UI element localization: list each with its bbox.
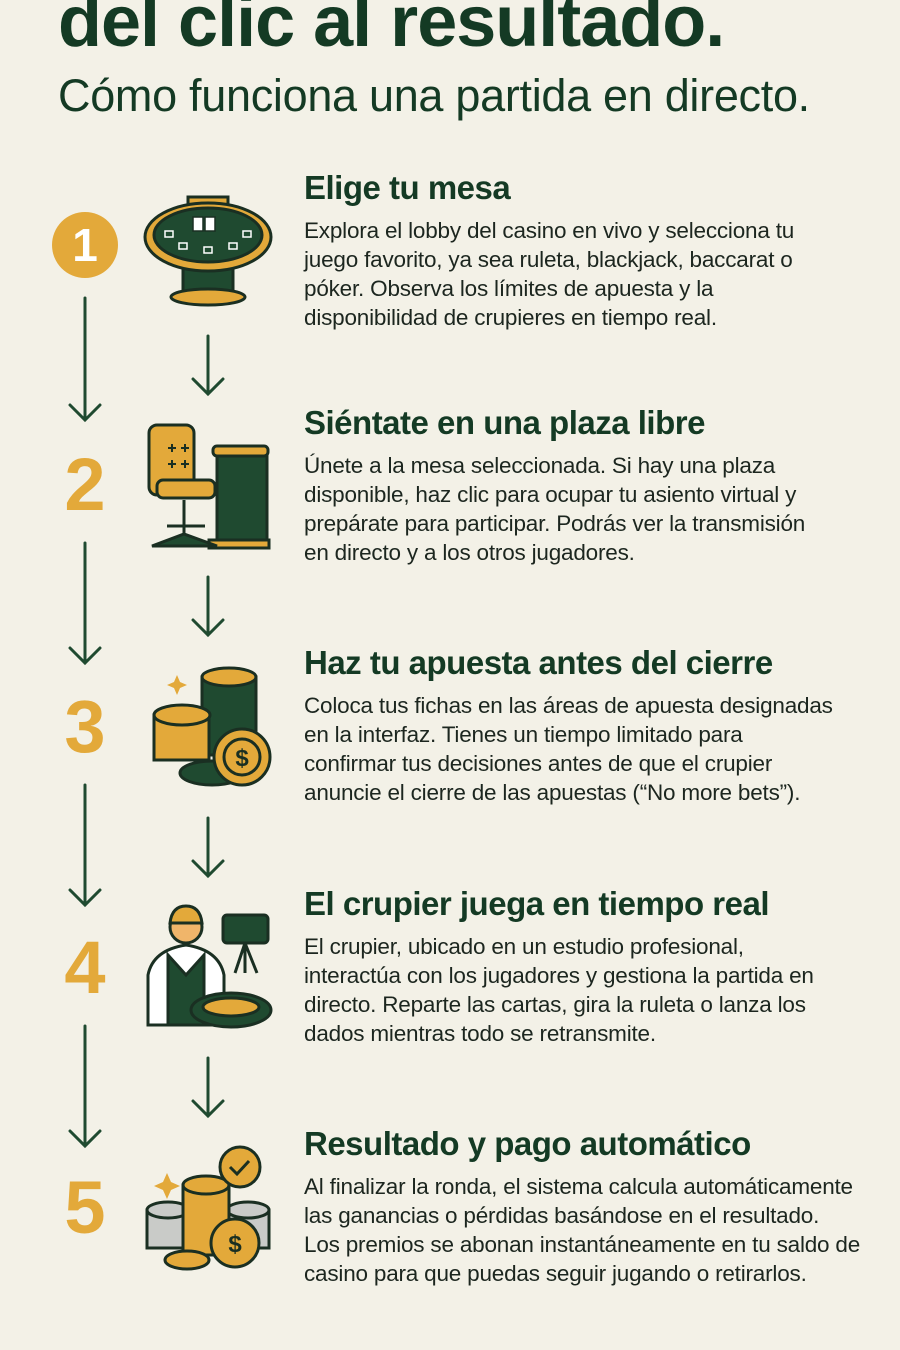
text 4 xyxy=(304,934,814,1046)
icon: coins with check: $ xyxy=(228,1231,242,1258)
heading 5: Resultado y pago automático xyxy=(304,1125,751,1162)
text 5: Los premios se abonan instantáneamente en tu saldo de xyxy=(304,1232,860,1257)
text 5: Al finalizar la ronda, el sistema calcula automáticamente xyxy=(304,1174,853,1199)
heading 2: Siéntate en una plaza libre xyxy=(304,404,705,441)
text 3: confirmar tus decisiones antes de que el crupier xyxy=(304,751,772,776)
number 1 badge: 1 xyxy=(72,219,98,271)
text 1: póker. Observa los límites de apuesta y la xyxy=(304,276,713,301)
text 4: interactúa con los jugadores y gestiona la partida en xyxy=(304,963,814,988)
text 1: juego favorito, ya sea ruleta, blackjack, baccarat o xyxy=(304,247,793,272)
heading 3: Haz tu apuesta antes del cierre xyxy=(304,644,773,681)
text 2: en directo y a los otros jugadores. xyxy=(304,540,635,565)
text 3 xyxy=(304,693,833,805)
text 1 xyxy=(303,218,794,330)
number 1 badge xyxy=(52,212,118,278)
icon: casino table xyxy=(144,196,272,306)
number 4: 4 xyxy=(64,926,106,1009)
text 2: prepárate para participar. Podrás ver la transmisión xyxy=(304,511,805,536)
subtitle: Cómo funciona una partida en directo. xyxy=(58,70,810,121)
text 1: Explora el lobby del casino en vivo y selecciona tu xyxy=(304,218,794,243)
text 5 xyxy=(304,1174,860,1286)
heading 1: Elige tu mesa xyxy=(304,169,510,206)
text 3: en la interfaz. Tienes un tiempo limitado para xyxy=(304,722,743,747)
heading 4: El crupier juega en tiempo real xyxy=(304,885,769,922)
text 4: El crupier, ubicado en un estudio profesional, xyxy=(304,934,744,959)
text 1: disponibilidad de crupieres en tiempo real. xyxy=(304,305,717,330)
text 3: Coloca tus fichas en las áreas de apuesta designadas xyxy=(304,693,833,718)
text 2 xyxy=(304,453,805,565)
number 3: 3 xyxy=(64,685,106,768)
text 5: casino para que puedas seguir jugando o retirarlos. xyxy=(304,1261,807,1286)
text 4: directo. Reparte las cartas, gira la ruleta o lanza los xyxy=(304,992,806,1017)
icon: chip stacks xyxy=(152,666,272,786)
text 3: anuncie el cierre de las apuestas (“No more bets”). xyxy=(304,780,800,805)
text 5: las ganancias o pérdidas basándose en el resultado. xyxy=(304,1203,819,1228)
text 2: disponible, haz clic para ocupar tu asiento virtual y xyxy=(304,482,796,507)
text 4: dados mientras todo se retransmite. xyxy=(304,1021,656,1046)
number 5: 5 xyxy=(64,1166,106,1249)
text 2: Únete a la mesa seleccionada. Si hay una plaza xyxy=(304,453,775,478)
number 2: 2 xyxy=(64,443,106,526)
icon: chip stacks: $ xyxy=(235,745,249,772)
icon: chair and table xyxy=(148,424,270,550)
icon: coins with check xyxy=(146,1146,270,1270)
icon: dealer with camera xyxy=(146,904,272,1028)
